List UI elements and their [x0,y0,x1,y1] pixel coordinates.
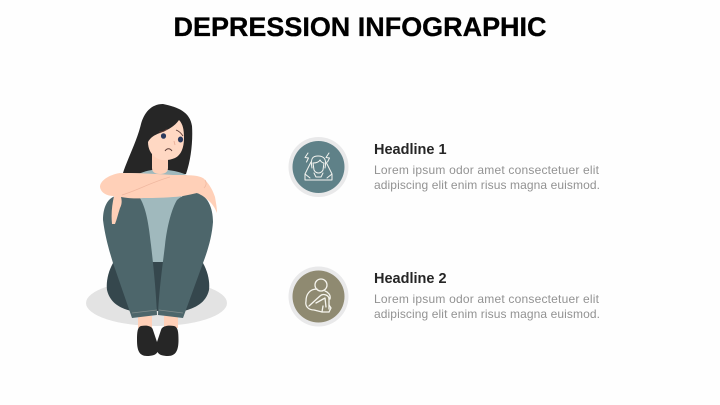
hair [123,104,192,174]
right leg [158,193,213,318]
hips [107,240,209,311]
shoes [137,326,178,356]
item 1 body text [374,163,600,192]
illustration: sad woman hugging knees [86,104,227,356]
item 1 headline: Headline 1 [374,142,447,158]
item 2 body text: adipiscing elit enim risus magna euismod. [374,307,600,321]
item 2 icon [288,266,348,326]
item 1 icon [288,137,348,197]
arms [100,173,217,224]
jeans hem stitching [132,310,183,313]
feet skin [138,316,178,328]
facial features [159,129,183,151]
item 2 body text [374,292,600,321]
item 1 body text: Lorem ipsum odor amet consectetuer elit [374,163,600,177]
item 2 headline: Headline 2 [374,271,447,287]
face [148,120,184,160]
arm crease [122,177,206,195]
floor shadow [86,280,227,326]
icon: person curled up [306,279,331,312]
neck [152,152,168,174]
title: DEPRESSION INFOGRAPHIC [174,12,546,42]
item 1 body text: adipiscing elit enim risus magna euismod. [374,178,600,192]
item 2 body text: Lorem ipsum odor amet consectetuer elit [374,292,600,306]
left leg [103,194,157,318]
shirt [138,170,188,262]
icon: person with headache [305,153,332,180]
